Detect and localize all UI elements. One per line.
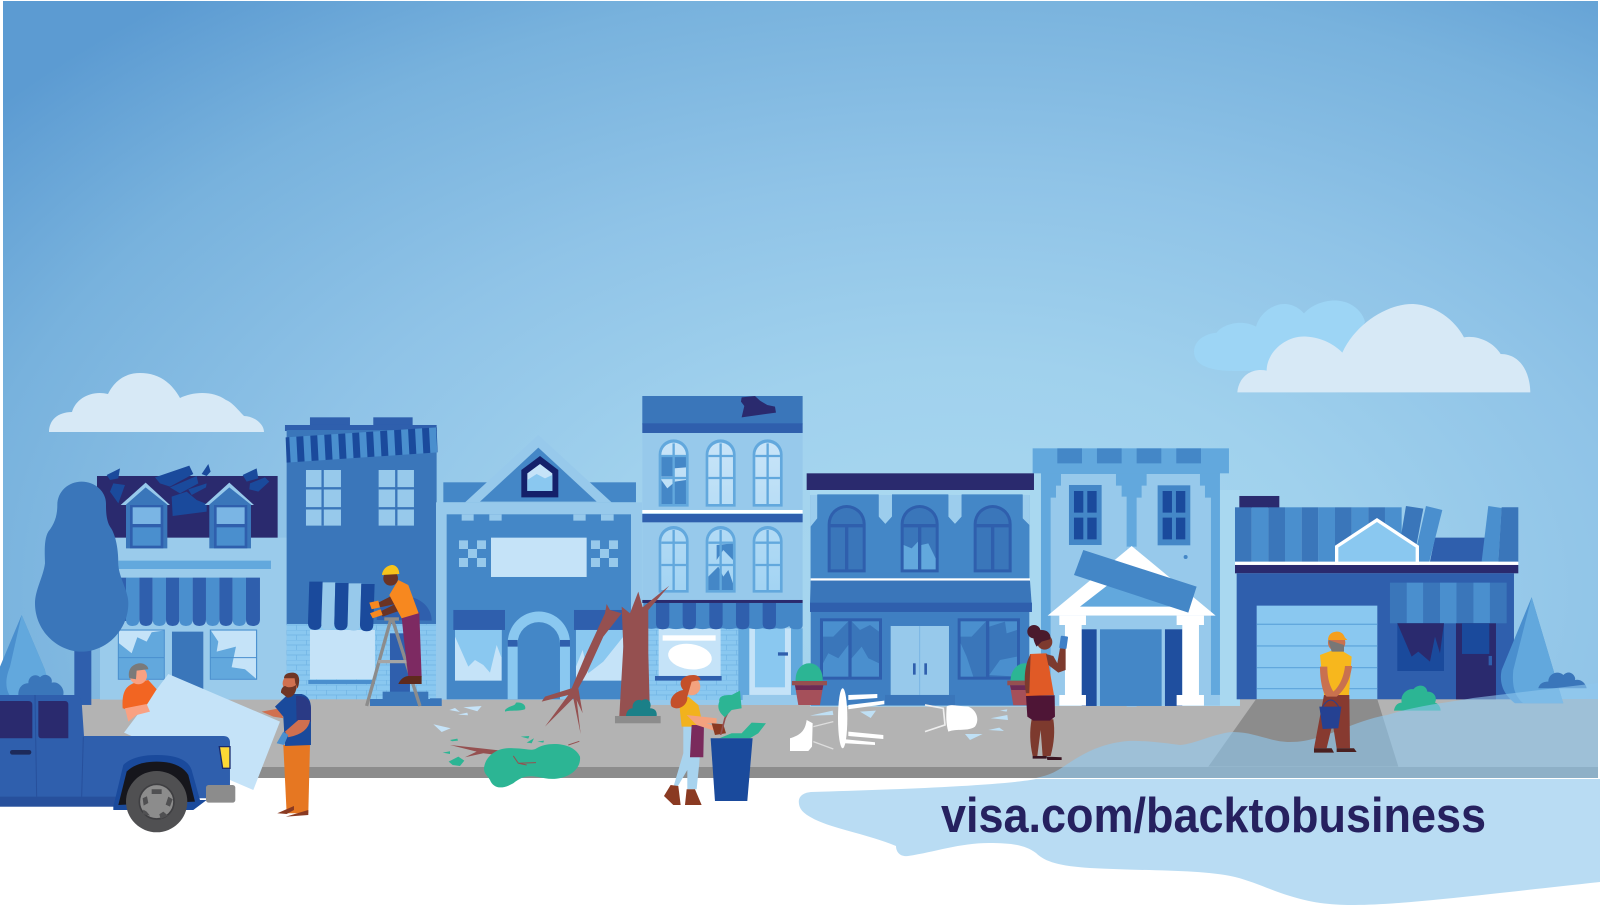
bush near garage — [1394, 686, 1441, 711]
fallen branch with leaves — [443, 736, 580, 787]
building 3: gabled shop — [430, 435, 642, 706]
toppled table and chairs — [790, 688, 977, 751]
man with bucket — [1314, 632, 1357, 753]
back tree left — [0, 615, 64, 700]
cloud: right front — [1237, 304, 1530, 392]
man behind panel — [122, 663, 157, 722]
potted plant left — [792, 663, 827, 705]
url text: visa.com/backtobusiness — [941, 789, 1486, 843]
building 7: garage with broken roof — [1235, 496, 1518, 699]
building 4: three storey with arched windows — [642, 396, 803, 705]
potted plant right — [1007, 663, 1033, 705]
planter and broken tree — [542, 586, 669, 734]
cloud: left — [49, 373, 264, 432]
back tree right — [1501, 597, 1587, 703]
debris: glass shards — [433, 702, 525, 732]
debris: shards by chairs — [810, 709, 1008, 740]
building 5: wide two storey — [807, 473, 1034, 707]
floodwater over street — [1036, 683, 1598, 778]
woman with phone — [1025, 625, 1068, 760]
building 6: columned porch — [1030, 448, 1240, 707]
big tree — [35, 482, 128, 705]
building 2: tall shop with ladder — [285, 417, 442, 706]
sheet panel carried — [124, 674, 280, 790]
woman with bin — [664, 675, 766, 805]
worker on ladder — [367, 565, 422, 706]
cloud: right back — [1194, 301, 1365, 371]
floodwater puddle — [799, 779, 1600, 905]
sidewalk — [80, 699, 1598, 767]
truck — [0, 695, 235, 832]
driveway — [1208, 699, 1398, 767]
building 1: damaged roof shop — [97, 464, 287, 700]
curb — [250, 767, 1598, 778]
man with beard — [262, 673, 311, 817]
